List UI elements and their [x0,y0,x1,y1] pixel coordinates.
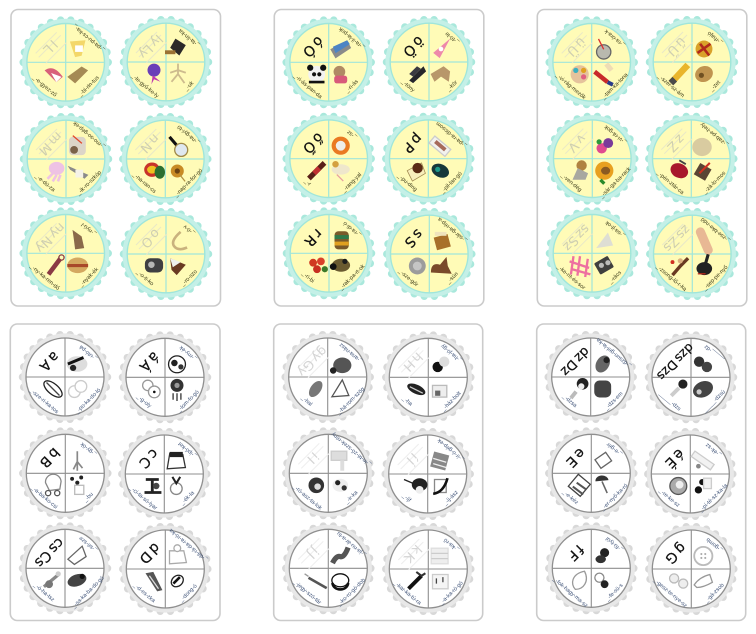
word bottom right: _-ir-ka [343,489,360,506]
icon: goose [694,574,712,588]
icon: dark octagon [594,381,611,397]
word bottom left: _-sze-ri-ka-tos [27,387,59,415]
icon: dark bear [330,259,350,272]
icon: rabbit [431,257,452,274]
icon: pink fence [570,256,590,277]
disc: Sz [548,210,636,297]
disc: B [22,430,109,517]
word bottom right: _-bi-rin-tus [77,75,101,99]
icon: keyboard [568,474,590,496]
icon: watch [597,39,611,59]
icon: soldier [595,64,613,85]
word bottom left: _-íjf [400,492,412,504]
icon: pudding [407,163,425,181]
word top right: _-in-té-ző-szek-rény [330,431,373,468]
word bottom left: _-ó-ha-tsz [31,582,55,603]
word top right: _-ta-lin-ka [177,27,202,49]
word top right: _-dá-rá-da-ra-ró-ka [168,526,210,563]
icon: bandage [700,232,708,250]
letters: ű Ű [663,33,689,59]
letters: m M [35,128,65,158]
icon: dark suit [409,66,426,83]
icon: pink cone [433,39,450,58]
icon: spotted dog [332,479,348,492]
word bottom left: _-jegy-szó-tár [291,579,322,606]
icon: fish [306,379,325,399]
word bottom right: _-íj-ász [442,490,460,508]
word bottom right: _-ri-ás [344,79,360,95]
icon: guard [309,163,324,178]
icon: wedge [170,258,186,275]
letters: c C [135,445,161,471]
icon: triangle ruler [332,380,349,397]
word bottom right: _-há-rom-szög [335,386,366,417]
icon: paint roller [331,451,347,471]
letters: ö Ö [399,32,428,61]
word top right: _-dzsun-gel-la-ka [595,336,633,369]
word top right: _-sz [346,129,359,141]
icon: bell [68,546,86,564]
disc: J [285,525,372,612]
icon: rope [173,232,187,249]
icon: stove [594,256,614,275]
disc: Gy [284,333,371,421]
word bottom left: _-a-ba-ko-csi [29,484,58,510]
word bottom left: _-ha [400,395,414,408]
letters: s S [401,226,426,250]
icon: beet [170,477,182,494]
icon: house [432,385,447,397]
icon: pansy [169,356,185,373]
icon: pale cage [431,548,448,564]
word top right: _-ana-nász [338,341,364,365]
word top right: _-ra-il-la-pok [338,25,367,51]
disc: Ö [385,18,473,106]
word bottom right: _-sep-pe-nyő [701,265,729,293]
icon: opener [48,255,64,274]
disc: Ü [548,19,635,106]
icon: typewriter [430,451,449,471]
disc: V [549,115,636,202]
icon: diamond mat [67,66,88,83]
icon: dark ring [308,478,324,493]
word bottom left: _-szer-sz-ám [655,73,685,99]
icon: comb [595,573,608,588]
letters: ny Ny [31,219,68,256]
icon: red berries [309,258,328,273]
word bottom left: _-e-kéz [560,489,579,506]
icon: dark brush [165,39,186,56]
word bottom left: _-ri-ás-pan-da [291,72,323,101]
icon: root [73,451,82,471]
word bottom left: _-d-es-zka [131,582,157,605]
icon: figure [671,380,687,396]
word bottom right: _-tam-ka-tona [600,72,630,102]
letters: dzs Dzs [654,340,697,384]
icon: black mouse [596,548,609,563]
icon: bear outline [170,545,186,564]
icon: fruit [144,163,165,179]
word bottom left: _-ci-ta-só-lyar [127,484,158,512]
letters: é É [661,445,688,472]
panel: grey cards Gy to K [274,324,483,620]
disc: Í [384,430,471,518]
word bottom right: _-sa-ka-ba-do-gó [70,575,106,611]
icon: box [434,232,451,250]
icon: bug [70,476,84,494]
word top right: _-ipő-ket [177,440,199,460]
letters: e E [562,444,588,470]
icon: boot [167,452,185,469]
word bottom right: _-uk [183,80,195,93]
letters: i I [303,448,321,466]
word bottom right: _-rak-pa-rt-ok [338,263,367,292]
word bottom right: _-nyak-ék [78,267,100,289]
word bottom left: _-sze-gőr [396,268,419,288]
letters: o O [137,225,163,251]
word top right: _-na-gyí-tó [176,124,202,146]
icon: pink girl [334,66,347,83]
icon: red-gold toy [696,41,712,57]
icon: unicorn [404,478,427,494]
word bottom right: _-gá-zsob [703,582,726,605]
word bottom right: _-fe-sü-s [604,583,625,603]
word top right: _-ra-óra-k [604,28,627,49]
word bottom right: _-ház-bolt [440,390,463,413]
word bottom left: _-le-gyű-ke-ly [129,73,160,100]
icon: moth [72,230,84,249]
icon: red purse [668,160,691,181]
icon: twin balls [143,380,160,398]
word bottom right: _-sün [445,271,460,286]
word bottom left: _-pu-ding [395,173,418,193]
disc: K [385,525,472,613]
icon: pineapple [330,358,351,374]
icon: dark jug [593,353,613,375]
icon: car [67,356,87,372]
word bottom right: _-a-ka-ró-gó [438,580,465,607]
icon: angel [332,161,350,181]
word bottom right: _-nap-ra-for-gó [173,168,204,199]
word bottom right: _-rang-yal [340,172,363,195]
word top right: _-ja-nu-ár-a-tu [336,530,368,558]
icon: bee [169,573,186,589]
word top right: _-mo-so-gép-ek [72,120,107,150]
letters: cs Cs [31,534,67,570]
letters: ő Ő [299,129,328,158]
disc: C [121,430,208,518]
word bottom right: _-kör [445,80,459,94]
word top right: _-utó-pá [78,343,99,362]
word top right: _-ka-rő [443,537,461,553]
icon: teddy [692,63,716,85]
icon: accordion [146,572,162,591]
icon: flowers [596,138,613,154]
icon: guest [572,160,588,180]
word top right: _-gy-ök [79,441,98,458]
icon: books [330,40,351,58]
icon: portrait [670,478,687,494]
word top right: _____-dz [703,343,726,363]
word bottom left: _-g-oly [134,393,152,410]
icon: purple flower [148,64,160,84]
letters: ü Ü [563,34,590,60]
disc: H [385,334,472,421]
word bottom left: _-pén-ztár-ca [655,169,685,197]
word bottom right: _-bu [82,492,95,504]
icon: apricot [595,162,613,184]
word bottom left: _-na-ran-cs [130,171,157,195]
disc: Ly [122,18,210,106]
icon: umbrella [595,476,608,493]
word bottom right: _-pil-lan-gó [439,171,464,196]
icon: yellow dress [70,40,86,57]
word bottom left: _-e-dú-za [33,173,56,194]
icon: cheese wedge [596,232,613,248]
icon: flower wreath [571,65,589,83]
word top right: _-zse-bke-ndő [700,216,732,244]
letters: z Z [663,131,687,155]
letters: ly Ly [135,31,165,61]
disc: S [386,210,473,298]
icon: sunflower [171,164,185,181]
word bottom left: _-ró-asz-ta-lok [290,483,323,512]
icon: butterfly [429,161,451,180]
icon: dark stones [694,356,712,372]
icon: stones [145,258,163,272]
word bottom left: _-r [302,178,312,188]
word top right: _-rhajó [707,30,725,46]
word bottom right: _-zá-lo-mos [701,170,727,196]
word bottom left: _-fok-hagy-ma-sz [551,576,589,609]
letters: sz Sz [560,221,592,254]
disc: A [21,333,109,421]
panel: grey cards A to D [10,324,220,620]
letters: v V [564,131,588,155]
word top right: _-ra-di-ó [342,220,363,239]
word top right: _-ö-v [182,223,197,237]
word bottom left: _-dzsa [560,393,578,410]
icon: autumn clock [332,137,350,155]
word top right: _-pa-ra-dicsom [435,120,469,149]
word bottom left: _-vi-rág-mezők [553,72,587,101]
disc: Ó [285,19,372,106]
disc: Zs [649,210,736,298]
panel: mint cards Ú to Zs [537,10,747,306]
letters: a A [36,348,62,374]
icon: mouse toy [595,452,612,468]
word bottom right: _-po-ka-do-ló [74,387,102,416]
disc: E [548,430,635,517]
icon: button [694,547,712,565]
icon: pink fan [45,68,63,82]
disc: Ő [285,115,372,202]
disc: É [647,430,734,518]
disc: Dz [547,333,634,421]
icon: watch [409,258,426,274]
letters: p P [399,130,425,156]
word top right: _-ha-jó-gy [440,342,464,364]
word top right: _-vi-rá-gok [603,123,629,146]
icon: moon [432,356,449,372]
word bottom left: _-ke-rít-és-sor [555,263,586,291]
disc: O [122,210,210,298]
icon: tap [44,571,61,588]
word top right: _-gomb [705,536,725,554]
icon: pan [694,163,712,181]
icon: colour bag [334,231,349,249]
word bottom right: _____-dzsú [701,389,727,415]
icon: razor [429,136,451,156]
disc: Ny [22,210,109,297]
word bottom left: _-e-gyez-ző [30,74,58,98]
word top right: _-nyú-l [81,221,98,237]
word bottom right: _-ék-la [179,490,196,507]
word top right: _-sár-ga-rép-a [436,215,469,244]
word top right: _-ék-sz [705,441,723,458]
word top right: _-ír-ó-gép-ek [437,437,466,463]
icon: cubes [432,574,448,589]
panel: mint cards O-accent to S [274,10,484,306]
word bottom left: _____-dzs [657,390,682,412]
disc: Z [648,115,735,202]
letters: l L [39,36,60,57]
word bottom left: _-ri-bi [300,270,315,285]
word bottom right: _-er-nyő-ka-ró [599,483,629,513]
word bottom right: _-rács [607,270,623,286]
word bottom right: _-ko-ro-gó-dob [336,577,367,609]
icon: dark leaves [66,571,88,589]
panel: mint cards L to O [11,10,220,306]
letters: b B [36,444,63,471]
letters: h H [400,349,425,374]
disc: G [648,525,735,613]
icon: figures [69,136,86,155]
icon: garlic [573,571,586,589]
word bottom left: _-ven-dég [559,172,583,193]
letters: gy Gy [293,343,330,379]
disc: F [548,525,635,612]
panel: grey cards Dz to G [537,324,746,620]
word bottom left: _-töny [399,78,416,94]
word top right: _-e-gér [606,441,624,458]
disc: L [22,19,109,106]
disc: I [285,430,373,517]
letters: zs Zs [660,221,693,255]
letters: dz Dz [557,343,592,379]
icon: tan ox [431,66,450,82]
letters: í Í [403,449,421,468]
disc: M [22,115,110,203]
letters: r R [301,225,325,250]
word bottom right: _-dzs-em [603,391,625,412]
word top right: _-fü-tyül [605,535,625,553]
icon: girl [571,378,588,398]
word bottom left: _-kar-ka-tú-ra [391,580,423,607]
word bottom left: _-hal [299,394,313,408]
word bottom right: _-dong-ó [178,583,199,604]
icon: dark hat [406,381,427,398]
disc: Á [121,334,209,421]
icon: pretzel outline [69,381,87,397]
icon: black dots [695,478,711,494]
word bottom left: _-o-ti-ko [134,269,154,287]
letters: n N [137,130,162,156]
icon: panda [307,65,326,83]
word bottom right: _-lom-fo-gó [175,389,201,415]
icon: surfboard [41,378,65,400]
icon: juggler [671,258,688,275]
word top right: _-sé-sze [78,535,99,554]
letters: ó Ó [299,33,328,61]
disc: Cs [21,525,109,612]
icon: drum [332,574,349,589]
word bottom left: _-ny-ka-ren-dő [28,263,60,292]
disc: Dzs [647,334,735,421]
icon: root [170,64,186,83]
letters: k K [400,541,424,565]
word bottom right: _-pí-té-sz-ka-la [698,482,730,514]
icon: glasses [670,574,688,588]
icon: hamburger [67,258,88,273]
disc: P [385,115,472,202]
icon: oats pile [692,138,712,156]
word bottom right: _-zet [708,80,722,94]
icon: stick [305,574,327,588]
icon: black tool [408,572,425,589]
word bottom right: _-ro-szo [179,269,199,288]
icon: anchor figure [144,480,161,492]
icon: pencil [671,65,688,83]
disc: R [285,210,373,297]
letters: d D [136,539,163,567]
letters: f F [564,541,587,564]
word bottom left: _-gesz-te-nye-sz [651,577,688,609]
word bottom left: _-re-ke-sz [657,487,681,509]
word top right: _-sa-jt-ok [604,219,627,239]
icon: twisted rope [332,548,348,563]
word bottom left: _-zsong-lő-r-ka [654,263,688,293]
disc: Ű [648,18,736,106]
word top right: _-rny-ék [178,344,199,362]
word bottom right: _-ik-ro-szkóp [75,170,103,198]
disc: D [122,525,210,613]
disc: N [122,115,209,203]
icon: pale bench [691,451,714,470]
icon: magnifier [170,137,188,156]
icon: bow square [433,478,448,494]
letters: g G [662,539,689,567]
word top right: _-pa-pu-cs-ka-_ [71,22,107,54]
icon: microscope [68,166,88,179]
word top right: _-zab-pe-hely [699,121,730,148]
icon: black pan [696,254,712,275]
icon: dreamcatcher [170,379,184,401]
letters: á Á [136,348,163,375]
letters: j J [303,543,322,561]
icon: dark leaves [690,378,716,401]
icon: pram [45,474,61,496]
word bottom right: _-sár-ga-ba-rack [598,166,633,200]
word top right: _-tö-le [444,30,461,46]
icon: jellyfish [48,162,64,181]
